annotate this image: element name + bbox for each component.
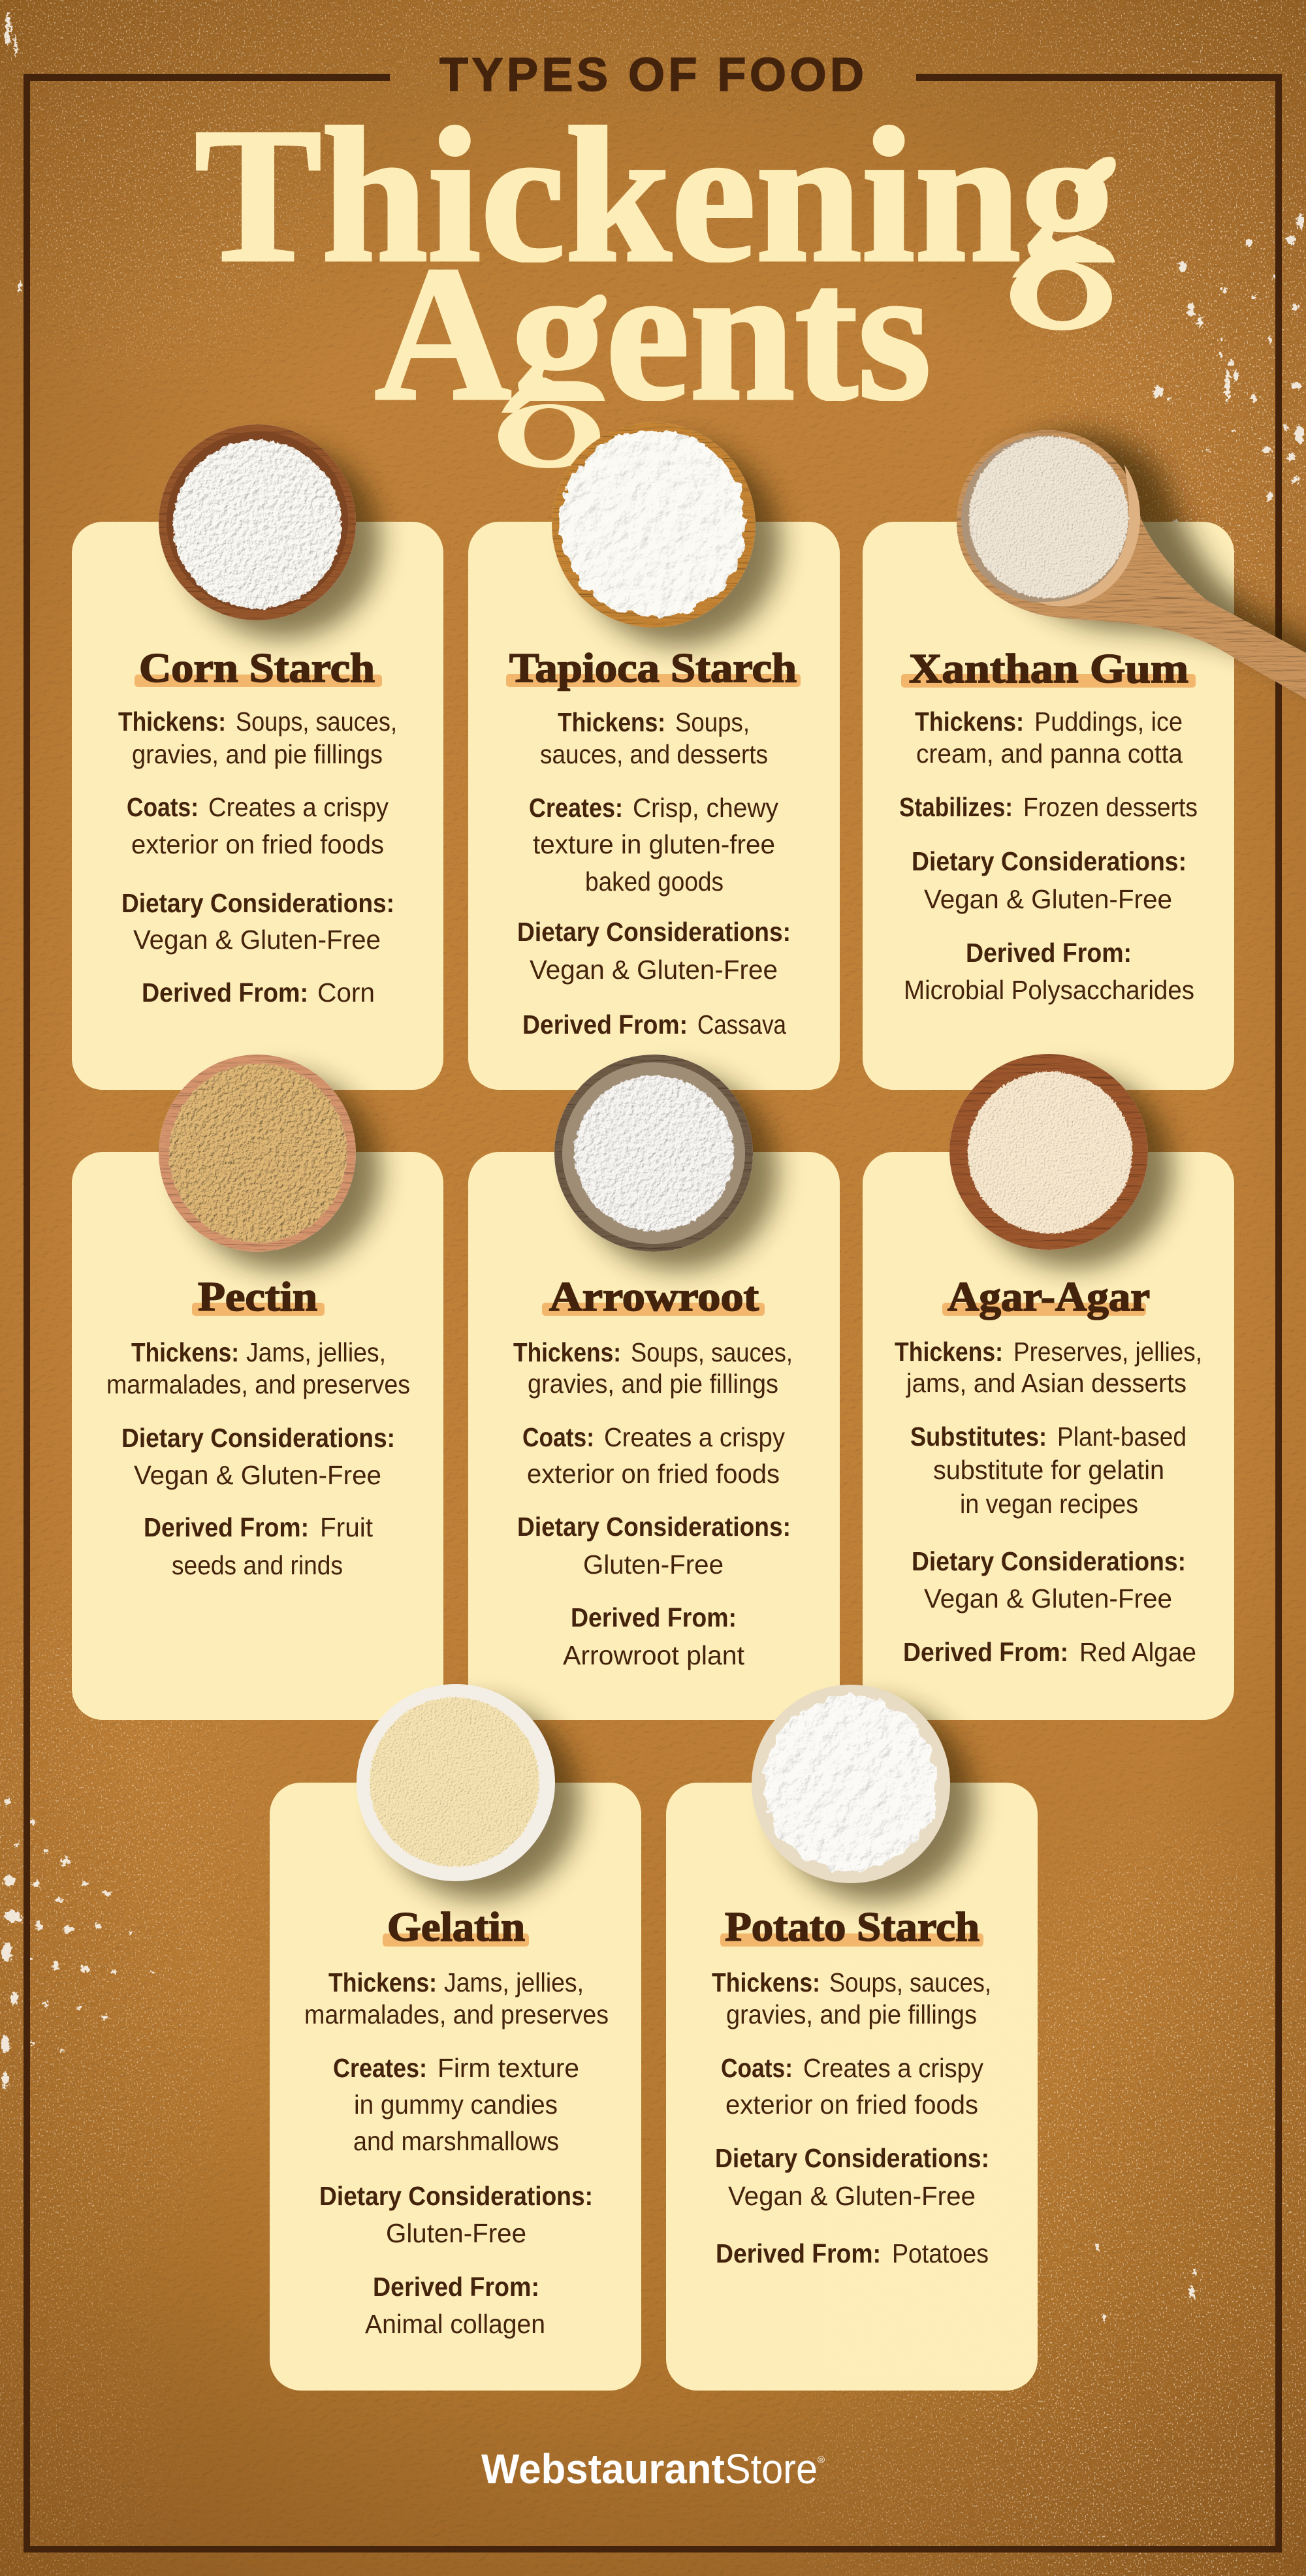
- text: dietary considerations: Dietary Considerations:: [121, 888, 394, 918]
- text: thickens: Soups, sauces,: [829, 1967, 991, 1997]
- text: substitutes: substitute for gelatin: [933, 1455, 1164, 1485]
- text: derived from: Derived From:: [373, 2272, 539, 2302]
- text: derived from: Derived From:: [903, 1637, 1068, 1667]
- text: derived from: [904, 938, 1194, 1005]
- text: thickens: marmalades, and preserves: [304, 1999, 609, 2029]
- text: creates: Crisp, chewy: [633, 793, 778, 823]
- text: derived from: [563, 1602, 745, 1670]
- text: thickens: Soups, sauces,: [631, 1337, 793, 1367]
- text: coats: Coats:: [721, 2053, 793, 2083]
- panel: arrowroot: [468, 1055, 840, 1720]
- heading: tapioca starch: Tapioca Starch: [509, 644, 797, 691]
- text: thickens: Thickens:: [131, 1337, 239, 1367]
- text: creates: texture in gluten-free: [533, 829, 775, 859]
- text: thickens: Puddings, ice: [1034, 707, 1183, 737]
- logo: WebstaurantStore: Webstaurant: [481, 2445, 725, 2492]
- text: dietary considerations: Dietary Considerations:: [517, 917, 791, 947]
- icon: terracotta bowl of pectin: [159, 1055, 381, 1270]
- text: dietary considerations: [319, 2181, 593, 2248]
- text: dietary considerations: [517, 1512, 791, 1580]
- text: thickens: marmalades, and preserves: [106, 1369, 410, 1399]
- text: dietary considerations: Vegan & Gluten-Free: [924, 1583, 1172, 1614]
- text: thickens: [304, 1967, 609, 2029]
- heading: corn starch: Corn Starch: [139, 644, 375, 691]
- text: thickens: Thickens:: [895, 1337, 1003, 1367]
- text: dietary considerations: Vegan & Gluten-Free: [133, 925, 381, 955]
- text: coats: Coats:: [522, 1422, 594, 1452]
- heading: potato starch: Potato Starch: [725, 1903, 980, 1950]
- text: thickens: jams, and Asian desserts: [906, 1368, 1187, 1398]
- panel: tapioca starch: [468, 422, 840, 1090]
- text: dietary considerations: Vegan & Gluten-Free: [728, 2181, 976, 2211]
- text: stabilizes: Frozen desserts: [1023, 792, 1198, 822]
- text: dietary considerations: [517, 917, 791, 985]
- text: dietary considerations: Dietary Considerations:: [121, 1423, 395, 1453]
- text: derived from: Animal collagen: [365, 2309, 545, 2339]
- text: coats: [721, 2053, 983, 2120]
- text: dietary considerations: Dietary Considerations:: [912, 846, 1187, 876]
- panel: potato starch: [666, 1685, 1038, 2391]
- text: stabilizes: Stabilizes:: [899, 792, 1013, 822]
- logo: WebstaurantStore: Store: [725, 2445, 818, 2492]
- panel: corn starch: [72, 424, 443, 1090]
- text: thickens: [712, 1967, 991, 2029]
- text: derived from: [903, 1637, 1196, 1667]
- text: derived from: Arrowroot plant: [563, 1640, 745, 1670]
- text: thickens: [895, 1337, 1202, 1398]
- text: creates: Creates:: [529, 793, 623, 823]
- heading: arrowroot: Arrowroot: [549, 1273, 759, 1320]
- heading: pectin: Pectin: [198, 1273, 317, 1320]
- text: thickens: Preserves, jellies,: [1013, 1337, 1202, 1367]
- icon: bamboo dish of tapioca starch: [552, 422, 781, 646]
- text: thickens: [106, 1337, 410, 1399]
- text: derived from: Derived From:: [571, 1602, 737, 1632]
- text: coats: exterior on fried foods: [725, 2090, 978, 2120]
- text: coats: exterior on fried foods: [527, 1459, 780, 1489]
- text: thickens: Soups,: [675, 707, 750, 737]
- text: coats: [522, 1422, 785, 1489]
- text: thickens: [118, 707, 397, 769]
- text: dietary considerations: Dietary Considerations:: [715, 2143, 989, 2173]
- logo: WebstaurantStore: ®: [818, 2455, 825, 2466]
- text: thickens: [915, 707, 1183, 769]
- text: thickens: Thickens:: [915, 707, 1024, 737]
- text: coats: Coats:: [127, 792, 199, 822]
- heading: xanthan gum: Xanthan Gum: [909, 645, 1188, 692]
- text: thickens: sauces, and desserts: [540, 739, 768, 769]
- text: dietary considerations: Vegan & Gluten-Free: [134, 1460, 381, 1490]
- text: thickens: Jams, jellies,: [444, 1967, 584, 1997]
- title: Thickening: [195, 88, 1116, 305]
- text: thickens: gravies, and pie fillings: [726, 1999, 977, 2029]
- icon: stoneware dish of arrowroot: [554, 1055, 778, 1270]
- text: substitutes: Plant-based: [1057, 1422, 1187, 1452]
- text: creates: in gummy candies: [354, 2090, 558, 2120]
- text: dietary considerations: Dietary Considerations:: [517, 1512, 791, 1542]
- text: coats: [127, 792, 389, 859]
- panel: xanthan gum: [863, 430, 1306, 1090]
- panel: gelatin: [270, 1684, 641, 2391]
- text: dietary considerations: [715, 2143, 989, 2211]
- text: derived from: Microbial Polysaccharides: [904, 975, 1194, 1005]
- text: thickens: gravies, and pie fillings: [528, 1369, 778, 1399]
- text: coats: Creates a crispy: [208, 792, 389, 822]
- icon: wooden bowl of corn starch: [159, 424, 381, 639]
- text: thickens: Thickens:: [558, 707, 665, 737]
- text: dietary considerations: Dietary Considerations:: [319, 2181, 593, 2211]
- text: derived from: Corn: [317, 978, 375, 1008]
- text: substitutes: [910, 1422, 1187, 1519]
- text: substitutes: Substitutes:: [910, 1422, 1047, 1452]
- title: [195, 88, 1116, 468]
- text: derived from: Fruit: [320, 1512, 374, 1542]
- text: creates: Creates:: [333, 2053, 427, 2083]
- text: creates: and marshmallows: [353, 2126, 559, 2156]
- text: derived from: Derived From:: [144, 1512, 309, 1542]
- text: derived from: Red Algae: [1079, 1637, 1196, 1667]
- text: thickens: gravies, and pie fillings: [132, 739, 383, 769]
- text: coats: Creates a crispy: [604, 1422, 785, 1452]
- text: derived from: Derived From:: [522, 1010, 688, 1040]
- icon: white dish of gelatin: [357, 1684, 580, 1900]
- text: derived from: [522, 1010, 786, 1040]
- text: thickens: cream, and panna cotta: [916, 739, 1183, 769]
- heading: agar-agar: Agar-Agar: [948, 1273, 1150, 1320]
- eyebrow: types of food: TYPES OF FOOD: [439, 49, 864, 101]
- text: derived from: Derived From:: [142, 978, 308, 1008]
- text: thickens: Thickens:: [328, 1967, 437, 1997]
- text: thickens: Thickens:: [513, 1337, 621, 1367]
- text: derived from: [144, 1512, 374, 1580]
- text: thickens: Jams, jellies,: [246, 1337, 386, 1367]
- text: dietary considerations: Dietary Considerations:: [912, 1546, 1186, 1576]
- text: thickens: Soups, sauces,: [236, 707, 397, 737]
- text: creates: [333, 2053, 579, 2156]
- panel: pectin: [72, 1055, 443, 1720]
- text: derived from: Cassava: [697, 1010, 786, 1040]
- text: coats: Creates a crispy: [803, 2053, 983, 2083]
- heading: gelatin: Gelatin: [387, 1903, 525, 1950]
- text: dietary considerations: [121, 888, 394, 955]
- text: dietary considerations: [121, 1423, 395, 1490]
- text: derived from: [716, 2238, 989, 2268]
- icon: cream dish of potato starch: [752, 1685, 975, 1901]
- text: creates: baked goods: [585, 867, 724, 897]
- text: thickens: Thickens:: [118, 707, 226, 737]
- text: dietary considerations: Gluten-Free: [386, 2218, 526, 2248]
- text: stabilizes: [899, 792, 1198, 822]
- text: thickens: Thickens:: [712, 1967, 820, 1997]
- text: dietary considerations: Vegan & Gluten-Free: [924, 884, 1172, 914]
- text: creates: [529, 793, 778, 897]
- text: thickens: [540, 707, 768, 769]
- text: derived from: seeds and rinds: [172, 1550, 343, 1580]
- text: derived from: Potatoes: [892, 2238, 989, 2268]
- text: dietary considerations: [912, 846, 1187, 914]
- text: derived from: [365, 2272, 545, 2339]
- panel: agar-agar: [863, 1054, 1234, 1720]
- title: Agents: [375, 227, 931, 443]
- text: thickens: [513, 1337, 793, 1399]
- icon: wooden bowl of agar-agar: [949, 1054, 1173, 1268]
- text: substitutes: in vegan recipes: [960, 1489, 1138, 1519]
- text: derived from: Derived From:: [716, 2238, 881, 2268]
- text: derived from: Derived From:: [966, 938, 1132, 968]
- text: dietary considerations: [912, 1546, 1186, 1614]
- text: creates: Firm texture: [438, 2053, 579, 2083]
- icon: wooden spoon of xanthan gum: [957, 430, 1306, 708]
- text: dietary considerations: Vegan & Gluten-Free: [530, 955, 778, 985]
- text: coats: exterior on fried foods: [131, 829, 384, 859]
- text: dietary considerations: Gluten-Free: [583, 1550, 724, 1580]
